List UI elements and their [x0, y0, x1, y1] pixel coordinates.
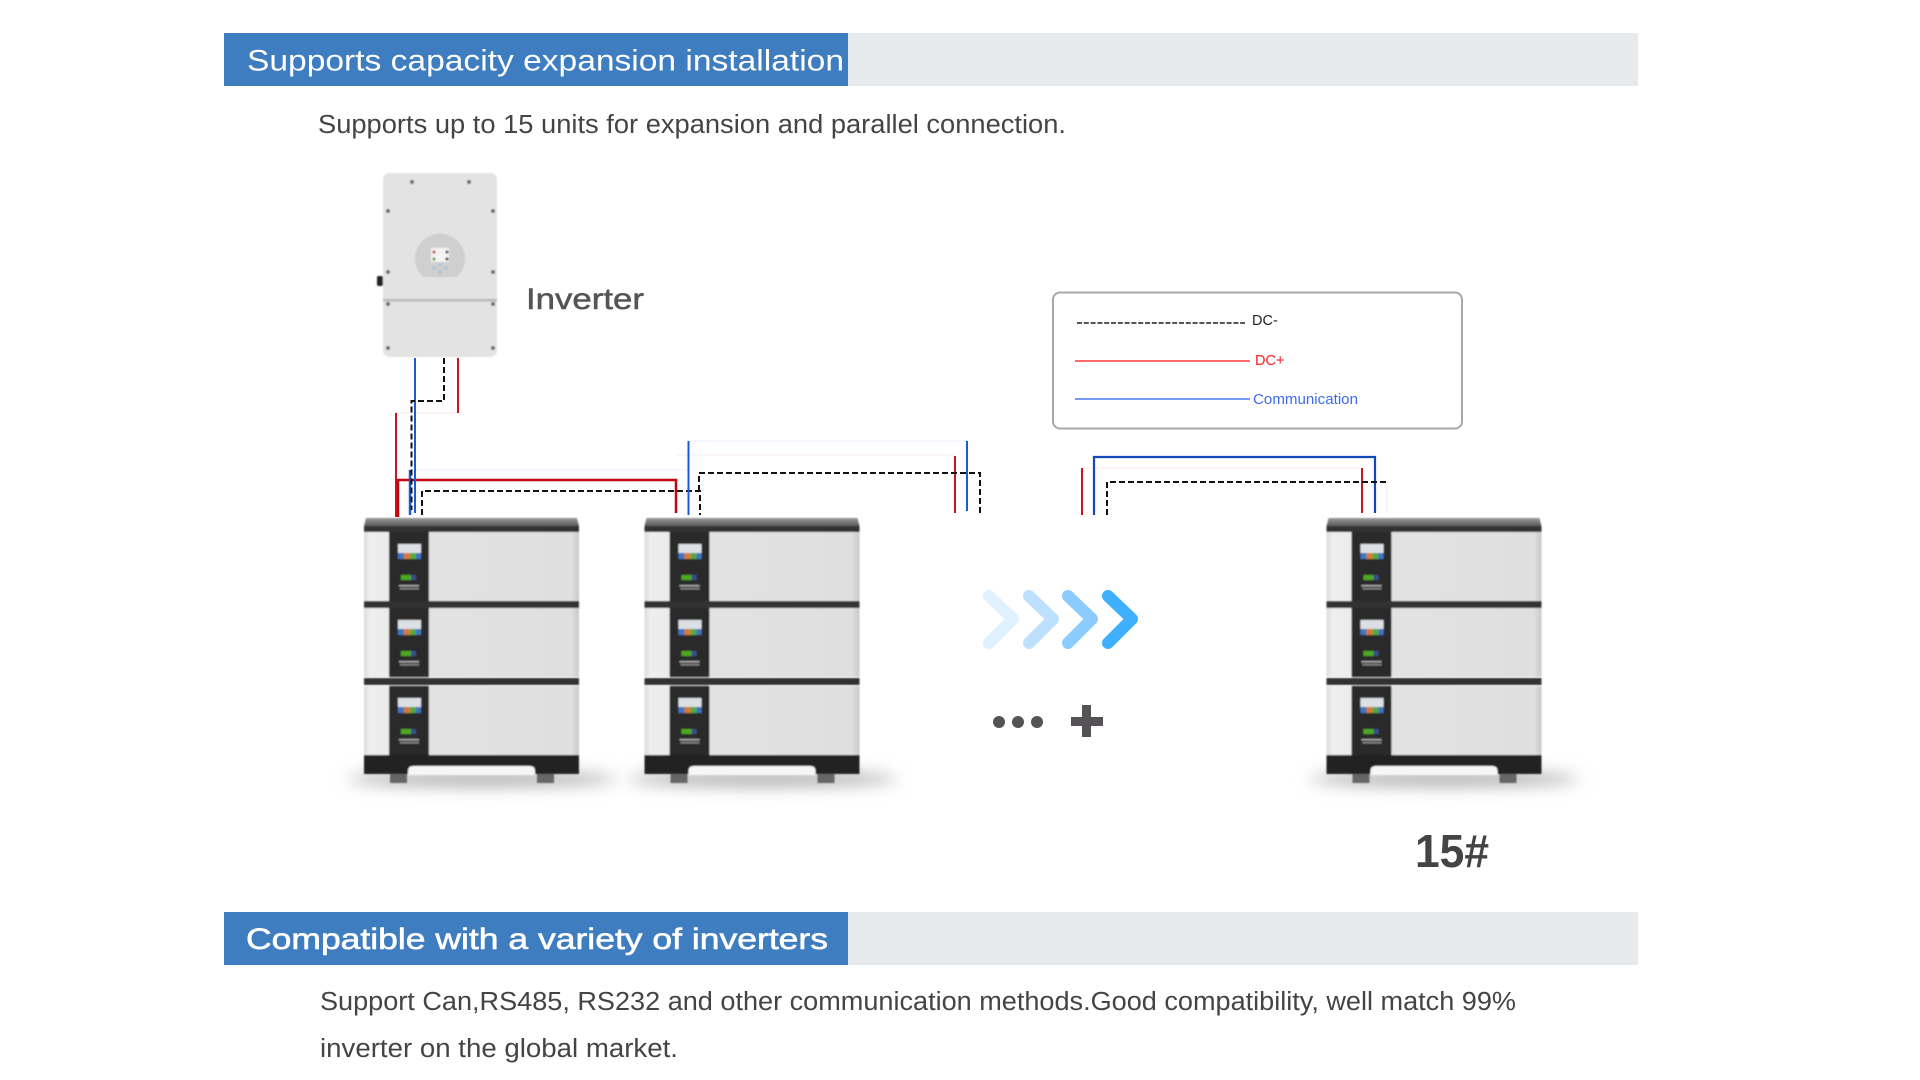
label: inverter: Inverter [526, 283, 644, 316]
icon: inverter [377, 173, 497, 357]
legend [1053, 292, 1462, 428]
arrows: progressive chevrons [989, 596, 1132, 643]
heading: compatibility: Compatible with a variety of inverters [246, 923, 828, 956]
label: unit number 15: 15# [1415, 825, 1489, 877]
legend: Communication [1253, 392, 1358, 408]
text: expansion description: Supports up to 15 units for expansion and parallel connection. [318, 111, 1066, 139]
battery stack 2 [628, 518, 898, 786]
text: compatibility description: inverter on the global market. [320, 1035, 678, 1063]
wiring: battery 15 [1082, 457, 1387, 515]
battery stack 15 [1310, 518, 1580, 786]
header bar: capacity expansion [224, 33, 1638, 86]
legend: DC- [1252, 313, 1278, 329]
wiring: battery 2 outgoing [676, 441, 980, 515]
icon: ellipsis [993, 716, 1043, 728]
legend: DC+ [1255, 353, 1284, 369]
wiring: inverter to battery 1 and 2 [396, 358, 700, 517]
icon: plus [1071, 705, 1103, 737]
text: compatibility description [320, 988, 1516, 1063]
text: compatibility description: Support Can,RS485, RS232 and other communication methods.Good compatibility, well match 99% [320, 988, 1516, 1016]
heading: capacity expansion: Supports capacity expansion installation [247, 44, 844, 78]
battery stack 1 [347, 518, 617, 786]
header bar: compatibility [224, 912, 1638, 965]
